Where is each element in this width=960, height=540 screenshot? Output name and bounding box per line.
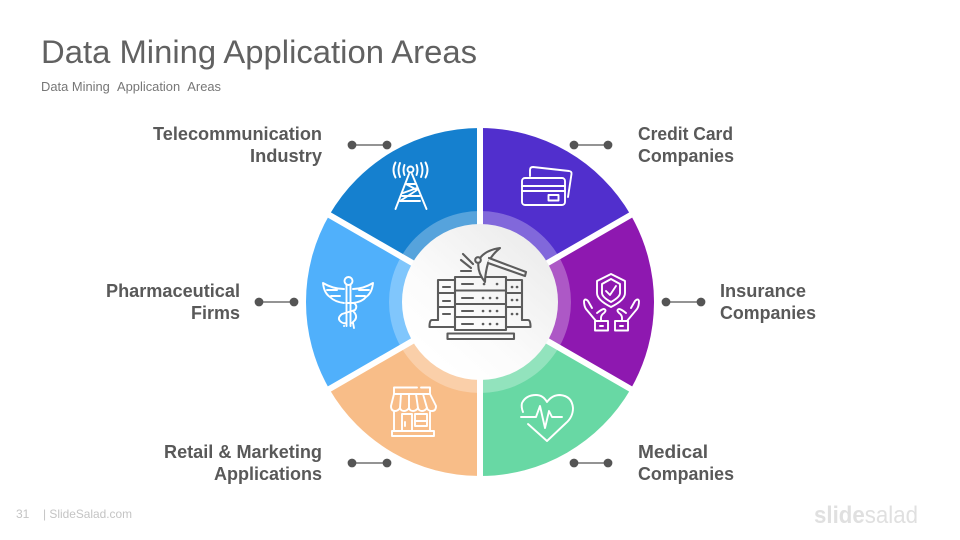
connector: pharmaceutical: [255, 298, 298, 306]
icon: telecom tower: [394, 162, 428, 209]
icon: storefront: [391, 388, 436, 436]
page number: 31: [16, 507, 30, 521]
segment: retail: [329, 302, 480, 476]
translucent ring: [389, 211, 571, 393]
label: credit card companies: [638, 124, 734, 166]
label: insurance companies: Companies: [720, 303, 816, 323]
label: medical companies: Medical: [638, 442, 708, 462]
center circle: [402, 224, 558, 380]
icon: caduceus: [323, 277, 373, 328]
label: telecommunication industry: Telecommunication: [153, 124, 322, 144]
label: medical companies: [638, 442, 734, 484]
label: credit card companies: Credit Card: [638, 124, 733, 144]
label: retail and marketing applications: Applications: [214, 464, 322, 484]
label: pharmaceutical firms: Pharmaceutical: [106, 281, 240, 301]
footer text: | SlideSalad.com: [43, 507, 132, 521]
label: pharmaceutical firms: Firms: [191, 303, 240, 323]
label: retail and marketing applications: Retail & Marketing: [164, 442, 322, 462]
label: retail and marketing applications: [164, 442, 322, 484]
connector: credit card: [570, 141, 612, 149]
label: insurance companies: [720, 281, 816, 323]
connector: medical: [570, 459, 612, 467]
segment: telecommunication: [329, 128, 480, 302]
label: pharmaceutical firms: [106, 281, 240, 323]
label: insurance companies: Insurance: [720, 281, 806, 301]
segment: medical: [480, 302, 631, 476]
icon: shield and hands: [584, 274, 639, 330]
connector: insurance: [662, 298, 705, 306]
connector: retail: [348, 459, 391, 467]
icon: data mining servers and pickaxe: [430, 248, 530, 339]
segment separators: [322, 120, 638, 484]
segment: credit card: [480, 128, 631, 302]
label: credit card companies: Companies: [638, 146, 734, 166]
subtitle: Data Mining Application Areas: [41, 80, 221, 94]
connector: telecommunication: [348, 141, 391, 149]
label: telecommunication industry: Industry: [250, 146, 322, 166]
segment: pharmaceutical: [306, 215, 480, 389]
donut chart: [306, 120, 654, 484]
logo wordmark: slidesalad: [814, 502, 918, 529]
title: Data Mining Application Areas: [41, 34, 477, 70]
icon: credit cards: [522, 167, 572, 205]
label: telecommunication industry: [153, 124, 322, 166]
icon: heart with pulse: [521, 395, 573, 441]
segment: insurance: [480, 215, 654, 389]
label: medical companies: Companies: [638, 464, 734, 484]
